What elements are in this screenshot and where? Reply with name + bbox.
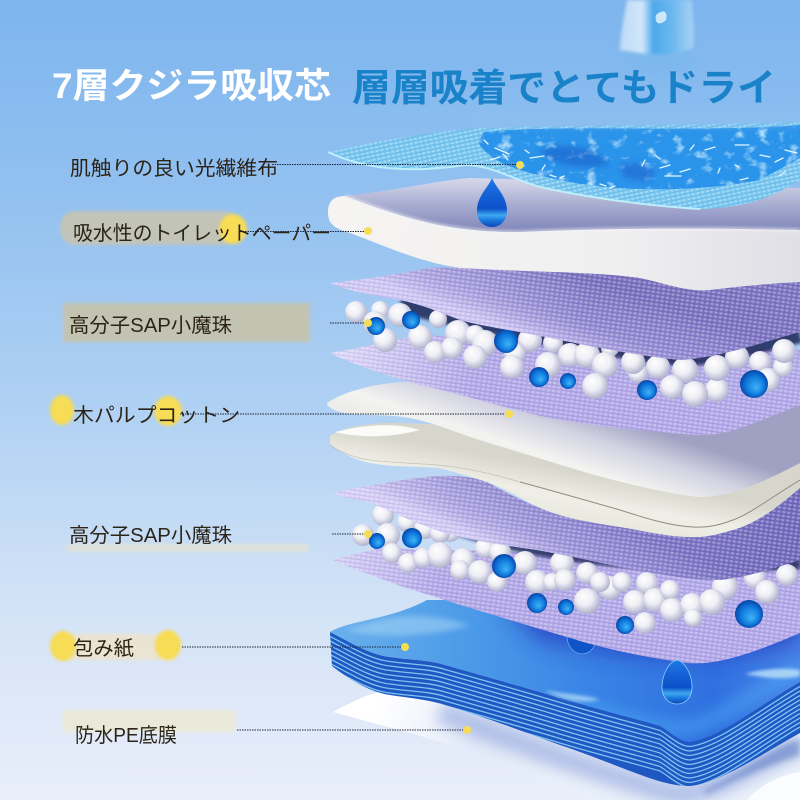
label: SAP lower <box>66 524 372 552</box>
layer 5: lower SAP sheet, upper fabric <box>332 476 800 580</box>
layer 2: absorbent toilet paper <box>328 178 800 290</box>
layer 4: cotton pulp, lower pillow <box>330 423 800 537</box>
title right: 層層吸着でとてもドライ <box>352 68 776 110</box>
label: cotton pulp: 木パルプコットン <box>73 404 240 427</box>
label: top sheet <box>70 157 524 180</box>
layer 7: waterproof PE film <box>333 692 800 800</box>
label: top sheet: 肌触りの良い光繊維布 <box>70 157 278 180</box>
label: SAP upper <box>63 303 372 342</box>
label: SAP lower: 高分子SAP小魔珠 <box>69 524 232 547</box>
water jet <box>620 0 696 74</box>
label: cotton pulp <box>50 395 513 427</box>
drop 2 <box>662 660 692 704</box>
water drops <box>477 178 692 704</box>
layer 5: lower SAP sheet, lower fabric <box>333 548 800 663</box>
layer 4: cotton pulp, upper pillow <box>327 381 800 497</box>
label: PE film <box>63 710 471 747</box>
layer 6: blue stacked wrapping paper <box>330 600 800 787</box>
label: SAP upper: 高分子SAP小魔珠 <box>69 314 232 337</box>
label: toilet paper: 吸水性のトイレットペーパー <box>73 222 331 245</box>
label: toilet paper <box>60 211 372 245</box>
SAP beads: lower group <box>352 504 800 634</box>
layer 3: upper SAP sheet, lower fabric <box>330 335 800 435</box>
water absorbed in the sheet <box>478 125 800 189</box>
label: PE film: 防水PE底膜 <box>75 724 177 747</box>
layer 1: light-fiber top sheet <box>328 112 800 209</box>
layer 3: upper SAP sheet, upper fabric <box>330 268 800 360</box>
haze over sheet back edge <box>470 112 800 122</box>
label: wrapping paper: 包み紙 <box>73 637 134 660</box>
drop behind fabric <box>567 618 597 654</box>
title left: 7層クジラ吸収芯 <box>52 67 331 106</box>
title <box>52 67 776 110</box>
drop 1 <box>477 178 507 227</box>
SAP beads: upper group <box>345 301 800 407</box>
label: wrapping paper <box>50 630 409 661</box>
